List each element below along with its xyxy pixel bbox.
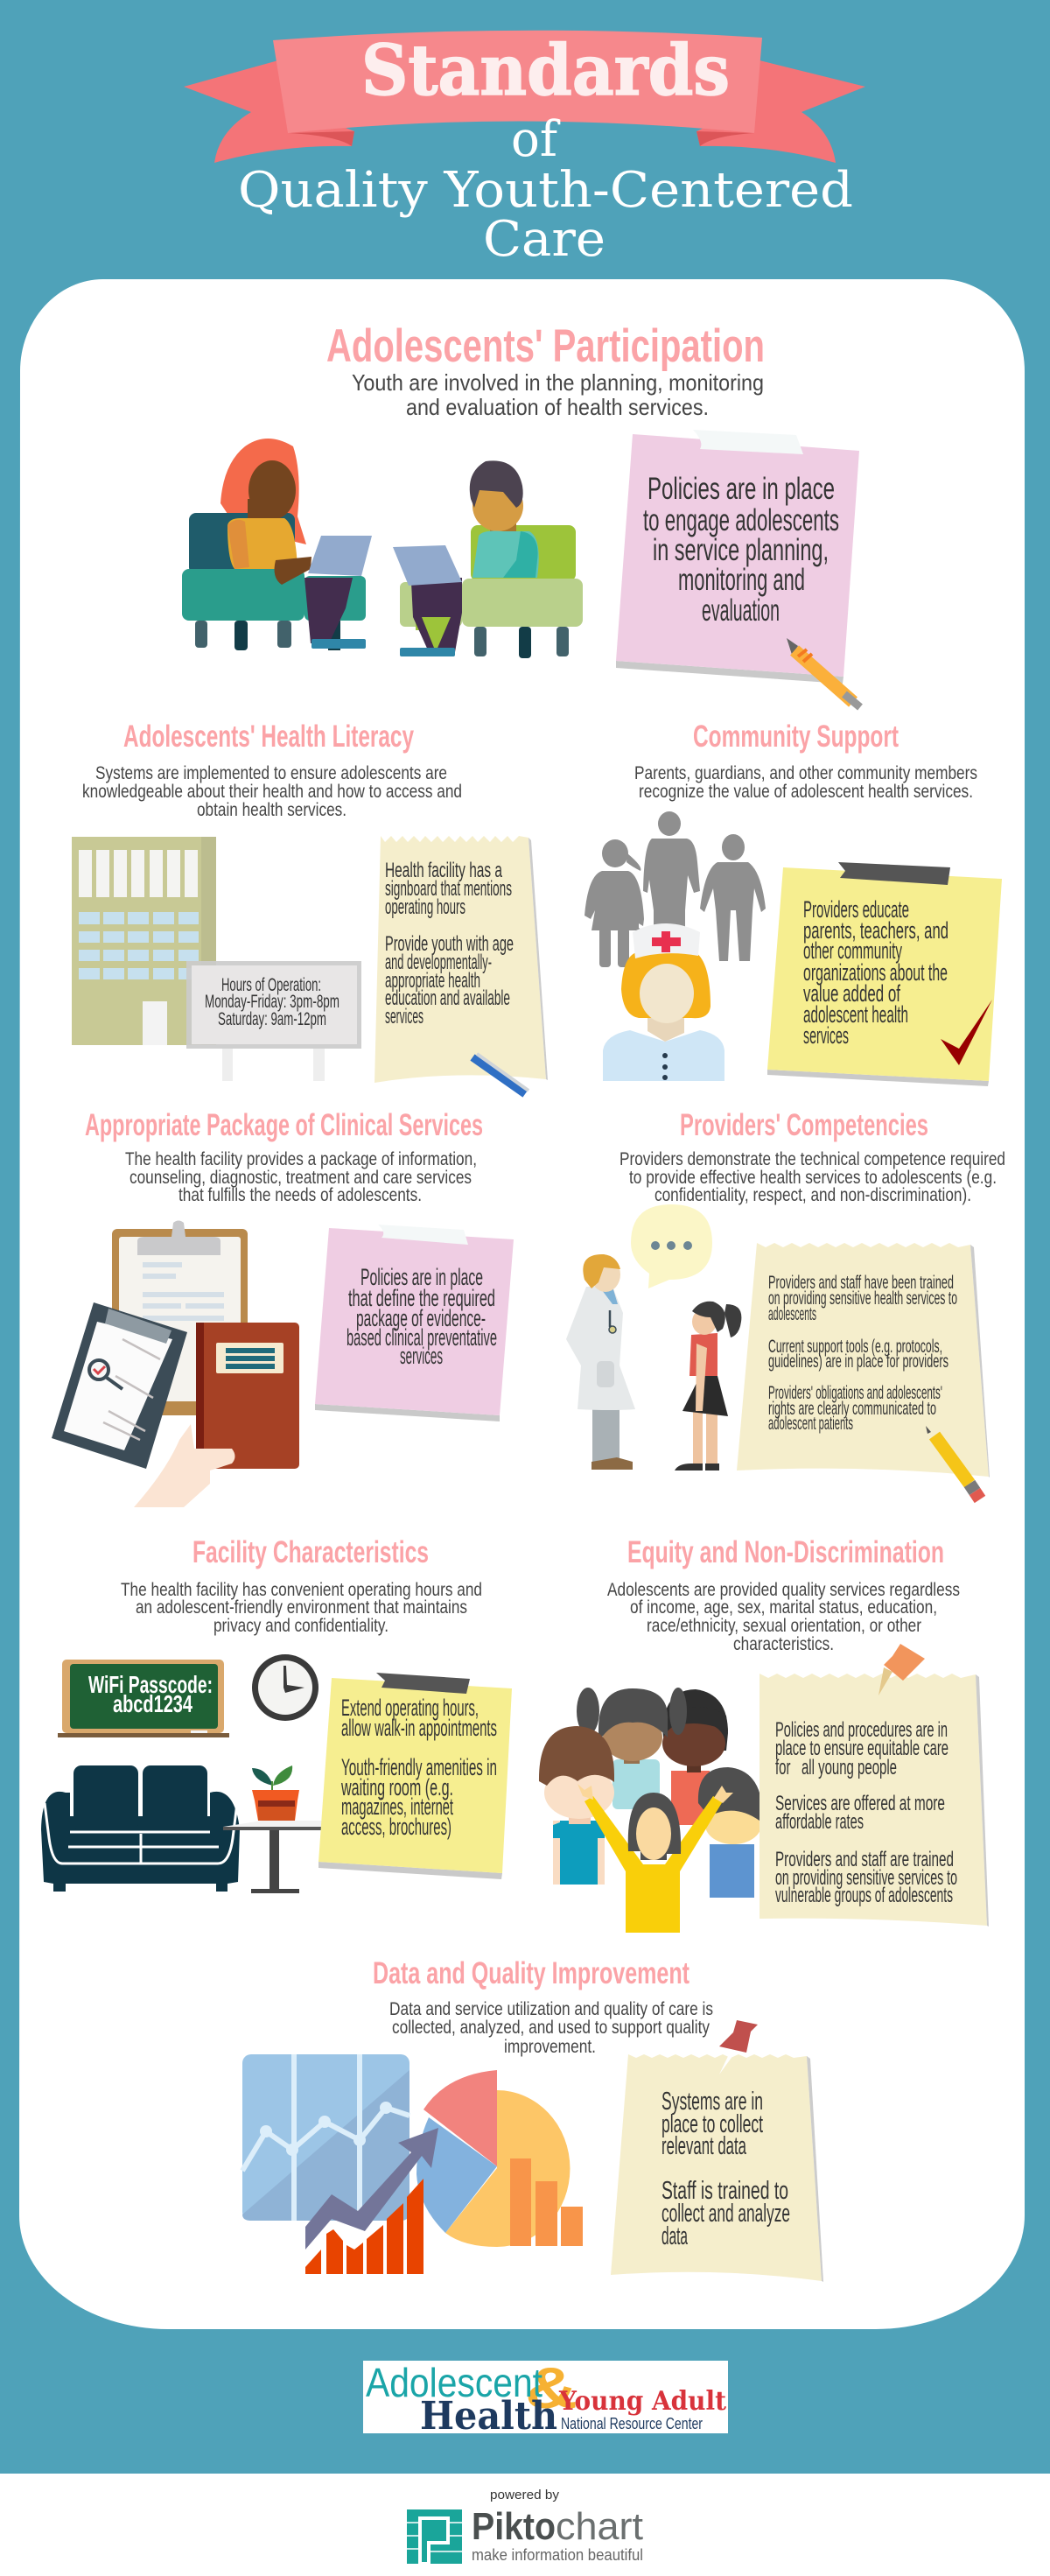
title text: of: [511, 111, 561, 168]
note: health literacy actions: signboard that mentions: [385, 877, 512, 901]
sticky note: facility actions: Youth-friendly amenities in: [341, 1754, 497, 1780]
icon: hours of operation sign: Monday-Friday: 3pm-8pm: [205, 992, 340, 1012]
logo: Adolescent and Young Adult Health National Resource Center: &: [525, 2355, 578, 2420]
description: recognize the value of adolescent health services.: [639, 782, 973, 802]
arrow trending up: [305, 2128, 438, 2250]
sticky note: policies: monitoring and: [678, 563, 805, 597]
icon: blue pen: [472, 1054, 528, 1094]
icon: grey family silhouettes: [584, 811, 766, 967]
description: Youth are involved in the planning, monitoring: [352, 369, 764, 396]
icon: wall clock: [252, 1654, 318, 1721]
sticky note: required package: Policies are in place: [360, 1264, 483, 1290]
description: [352, 369, 764, 420]
note: equity actions: for all young people: [775, 1756, 897, 1779]
description: knowledgeable about their health and how to access and: [82, 782, 462, 802]
sticky note: facility actions: magazines, internet: [341, 1793, 453, 1820]
note: data actions: collect and analyze: [662, 2200, 790, 2228]
icon: two youths with laptops on armchairs: [182, 439, 583, 658]
section: Adolescents' Health Literacy: [72, 719, 548, 1094]
heading: Facility Characteristics: [192, 1535, 429, 1569]
icon: check mark: [941, 1000, 992, 1065]
heading: Appropriate Package of Clinical Services: [85, 1108, 483, 1142]
note: health literacy actions: appropriate health: [385, 969, 480, 993]
note: equity actions: affordable rates: [775, 1810, 864, 1834]
sticky note: providers educate: [767, 862, 1002, 1086]
icon: WiFi chalkboard: [58, 1660, 229, 1737]
section: Facility Characteristics: [41, 1535, 512, 1893]
description: Adolescents are provided quality services regardless: [607, 1580, 960, 1600]
description: confidentiality, respect, and non-discrimination).: [654, 1185, 971, 1205]
icon: yellow pencil: [926, 1426, 980, 1499]
description: [125, 1149, 477, 1205]
footer: powered by Piktochart: Pikto: [472, 2505, 556, 2548]
icon: group of diverse youths: [539, 1688, 763, 1933]
logo: Adolescent and Young Adult Health National Resource Center: Health: [420, 2394, 557, 2439]
sticky note: providers educate: services: [803, 1022, 849, 1049]
icon: orange push pin: [878, 1644, 925, 1695]
sticky note: facility actions: waiting room (e.g.: [340, 1774, 453, 1800]
icon: clinic building: [72, 837, 216, 1045]
sticky note: policies: to engage adolescents: [643, 503, 839, 537]
sticky note: required package: [315, 1225, 514, 1421]
sticky note: facility actions: Extend operating hours,: [341, 1695, 479, 1721]
icon: nurse: [603, 923, 724, 1081]
icon: potted plant: [252, 1765, 299, 1821]
logo: Adolescent and Young Adult Health National Resource Center: National Resource Center: [561, 2415, 703, 2432]
section: Appropriate Package of Clinical Services: [52, 1108, 514, 1507]
description: and evaluation of health services.: [406, 394, 709, 420]
sticky note: required package: that define the required: [348, 1285, 495, 1311]
note: equity actions: Providers and staff are trained: [775, 1848, 954, 1871]
description: an adolescent-friendly environment that maintains: [136, 1597, 467, 1618]
description: Data and service utilization and quality of care is: [389, 1999, 713, 2019]
sticky note: policies: evaluation: [702, 593, 780, 628]
icon: speech bubble: [631, 1204, 712, 1288]
note: equity actions: [760, 1674, 989, 1927]
title text: Quality Youth-Centered: [238, 162, 853, 219]
sticky note: required package: package of evidence-: [356, 1305, 486, 1331]
orange column bars: [510, 2158, 583, 2246]
note: health literacy actions: services: [385, 1005, 424, 1028]
white content panel: [19, 279, 1025, 2329]
section: Community Support: [584, 719, 1002, 1086]
note: health literacy actions: Provide youth with age: [385, 932, 514, 956]
note: equity actions: place to ensure equitable care: [775, 1737, 948, 1760]
red rising bars: [305, 2179, 424, 2274]
description: The health facility has convenient operating hours and: [121, 1580, 482, 1600]
description: Parents, guardians, and other community members: [634, 763, 977, 783]
section: Adolescents' Participation: [182, 320, 860, 707]
icon: WiFi chalkboard: WiFi Passcode:: [88, 1671, 213, 1698]
sticky note: facility actions: access, brochures): [341, 1814, 452, 1840]
note: equity actions: Policies and procedures are in: [775, 1718, 948, 1742]
description: improvement.: [504, 2037, 596, 2057]
sticky note: providers educate: parents, teachers, and: [803, 917, 948, 944]
note: data actions: data: [662, 2222, 688, 2250]
note: health literacy actions: [374, 836, 548, 1083]
sticky note: facility actions: [318, 1673, 512, 1879]
sticky note: required package: services: [400, 1343, 443, 1369]
icon: clipboards and folder held by hand: [52, 1220, 299, 1507]
description: [634, 763, 977, 802]
heading: Providers' Competencies: [680, 1108, 928, 1142]
icon: sofa: [41, 1765, 240, 1892]
description: race/ethnicity, sexual orientation, or other: [647, 1616, 921, 1636]
sticky note: providers educate: other community: [803, 937, 902, 964]
icon: Piktochart mark: [407, 2509, 462, 2564]
note: data actions: Staff is trained to: [662, 2177, 788, 2205]
note: equity actions: Services are offered at more: [775, 1792, 945, 1815]
heading: Adolescents' Participation: [326, 320, 765, 372]
sticky note: providers educate: adolescent health: [803, 1001, 908, 1028]
icon: doctor: [566, 1254, 635, 1470]
sticky note: policies: in service planning,: [653, 533, 829, 567]
title text: Standards: [361, 29, 730, 111]
note: health literacy actions: operating hours: [385, 895, 466, 919]
description: privacy and confidentiality.: [214, 1616, 388, 1636]
icon: side table: [223, 1821, 324, 1893]
description: [121, 1580, 482, 1636]
note: health literacy actions: education and available: [385, 986, 510, 1010]
chart graphic: line panel, pie and bars: [242, 2054, 583, 2274]
icon: red push pin: [719, 2020, 758, 2074]
note: competencies actions: [737, 1243, 990, 1478]
icon: girl: [675, 1302, 741, 1470]
sticky note: required package: based clinical preventative: [346, 1324, 497, 1351]
description: [389, 1999, 713, 2057]
icon: hours of operation sign: Hours of Operation:: [221, 975, 321, 995]
footer: powered by Piktochart: [0, 2474, 1050, 2576]
note: data actions: relevant data: [662, 2132, 747, 2160]
heading: Adolescents' Health Literacy: [123, 719, 414, 754]
icon: hours of operation sign: [186, 961, 361, 1081]
description: obtain health services.: [197, 800, 346, 820]
note: competencies actions: adolescents: [768, 1304, 816, 1324]
pie chart: [416, 2070, 570, 2247]
description: counseling, diagnostic, treatment and care services: [130, 1168, 472, 1188]
note: data actions: Systems are in: [662, 2088, 763, 2116]
sticky note: providers educate: value added of: [803, 980, 900, 1007]
description: [82, 763, 462, 820]
heading: Community Support: [693, 719, 899, 754]
icon: WiFi chalkboard: abcd1234: [113, 1690, 192, 1717]
logo: Adolescent and Young Adult Health National Resource Center: [363, 2355, 728, 2439]
title banner ribbon: [184, 31, 865, 163]
icon: hours of operation sign: Saturday: 9am-12pm: [218, 1009, 326, 1029]
note: health literacy actions: Health facility has a: [385, 859, 502, 882]
note: competencies actions: adolescent patients: [768, 1414, 853, 1434]
note: data actions: place to collect: [662, 2110, 763, 2138]
logo: Adolescent and Young Adult Health National Resource Center: Young Adult: [558, 2386, 726, 2417]
description: collected, analyzed, and used to support quality: [392, 2018, 710, 2038]
note: health literacy actions: and developmentally-: [385, 951, 492, 974]
section: Providers' Competencies: [566, 1108, 1005, 1499]
section: Equity and Non-Discrimination: [539, 1535, 989, 1933]
blue line chart panel: [242, 2054, 410, 2221]
section: Data and Quality Improvement: [242, 1956, 823, 2282]
sticky note: providers educate: organizations about the: [803, 959, 948, 986]
description: of income, age, sex, marital status, education,: [630, 1597, 937, 1618]
note: competencies actions: rights are clearly communicated to: [768, 1399, 936, 1419]
sticky note: providers educate: Providers educate: [803, 896, 909, 923]
footer: powered by Piktochart: powered by: [490, 2488, 559, 2502]
heading: Data and Quality Improvement: [373, 1956, 690, 1990]
title text: [238, 29, 853, 268]
description: The health facility provides a package of information,: [125, 1149, 477, 1169]
note: data actions: [611, 2054, 823, 2282]
logo: Adolescent and Young Adult Health National Resource Center: Adolescent: [366, 2360, 542, 2405]
description: characteristics.: [733, 1634, 834, 1654]
sticky note: policies: [616, 430, 859, 684]
icon: orange pen: [787, 638, 860, 707]
description: Systems are implemented to ensure adolescents are: [95, 763, 447, 783]
description: [620, 1149, 1005, 1205]
description: [607, 1580, 960, 1654]
footer: powered by Piktochart: chart: [556, 2505, 643, 2548]
description: that fulfills the needs of adolescents.: [178, 1185, 422, 1205]
sticky note: facility actions: allow walk-in appointments: [341, 1715, 497, 1741]
sticky note: policies: Policies are in place: [648, 472, 835, 506]
footer: powered by Piktochart: make information beautiful: [472, 2546, 643, 2564]
title text: Care: [483, 211, 606, 268]
